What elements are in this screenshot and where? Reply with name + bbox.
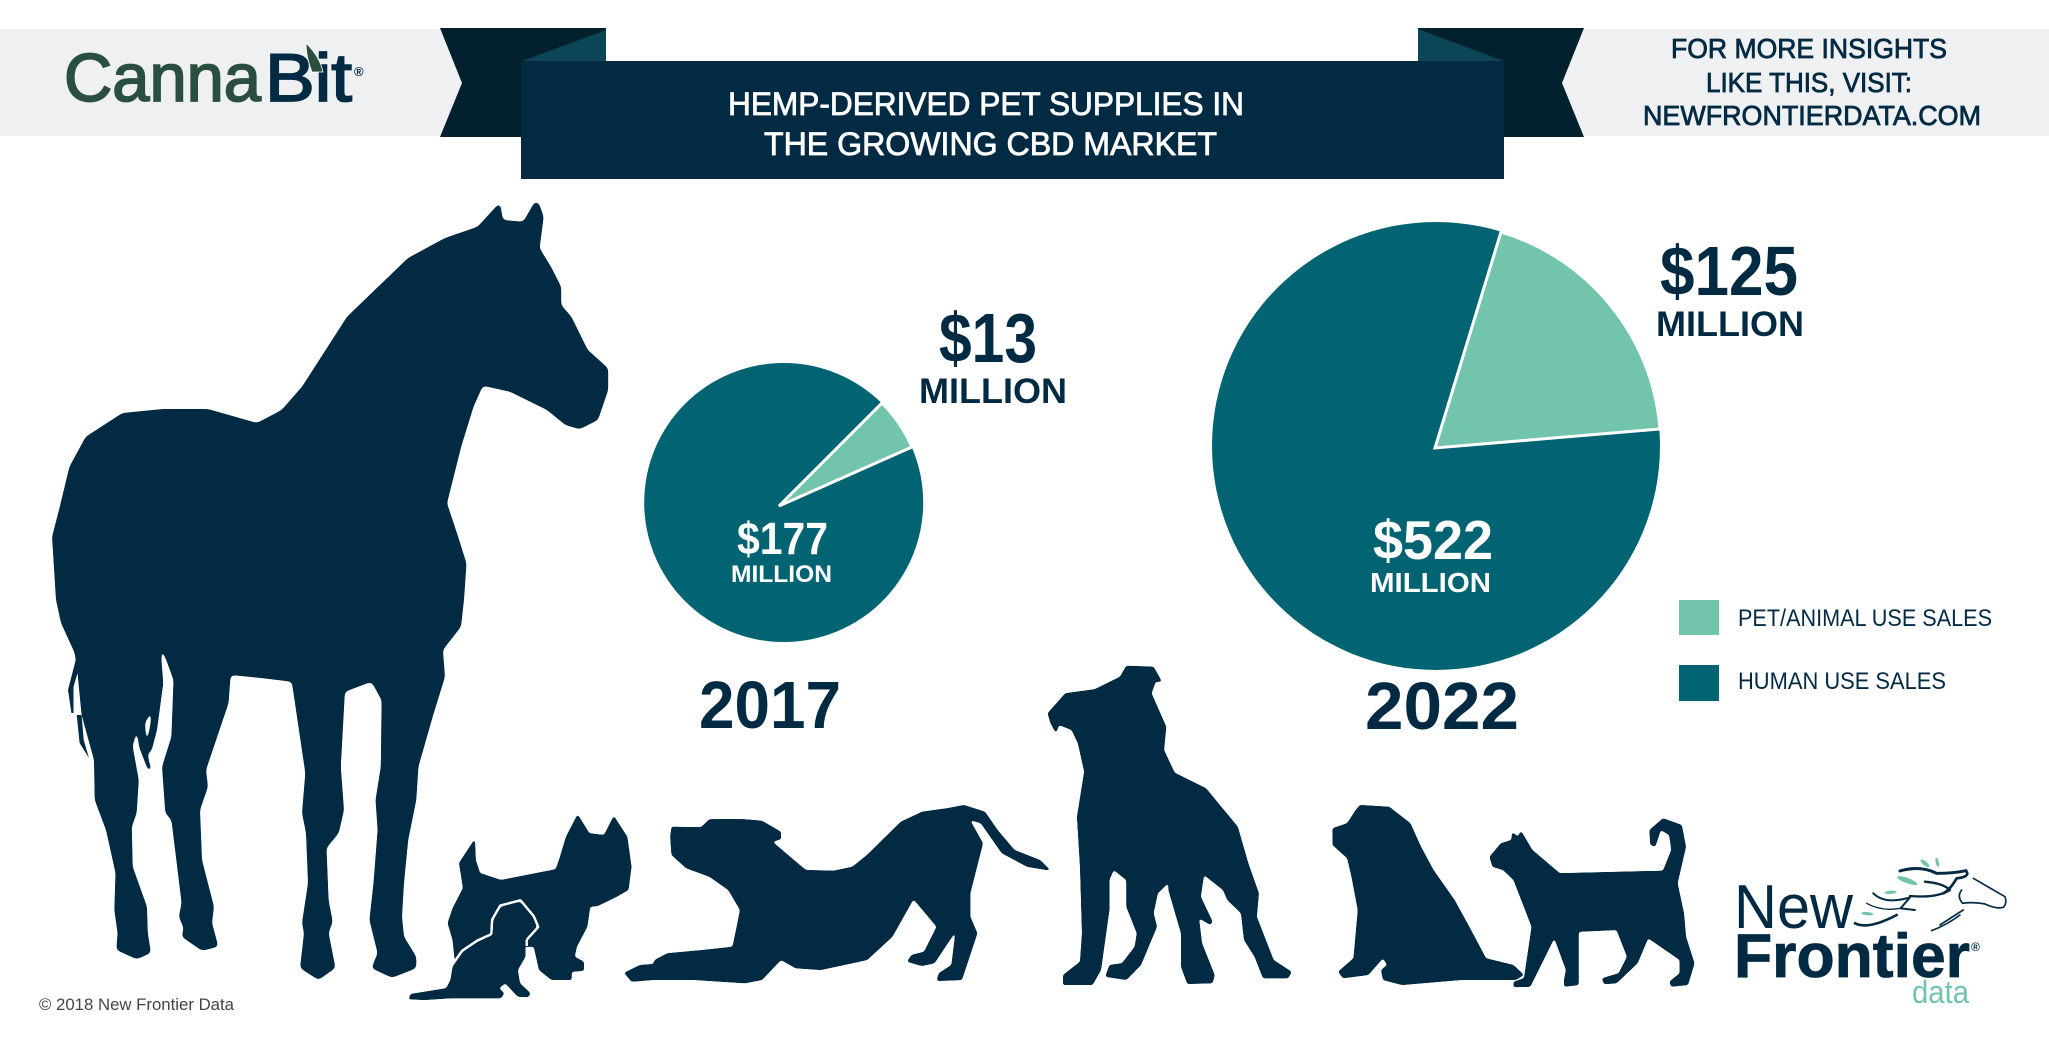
icon: running horse with leaves: [1855, 857, 2006, 931]
left fold highlight: [522, 30, 606, 61]
horse silhouette: [52, 202, 608, 980]
New Frontier data logo: New: [1734, 873, 1853, 942]
small dog silhouette: [448, 814, 632, 980]
right ribbon fold: [1418, 28, 1584, 137]
fluffy dog silhouette: [1332, 805, 1524, 985]
human sales label 2022: [1370, 509, 1493, 598]
cat silhouette: [1490, 818, 1694, 987]
human sales label 2022: $522: [1373, 509, 1493, 571]
icon: leaf on the i: [306, 43, 323, 72]
New Frontier data logo: [1734, 857, 2006, 1010]
pet sales label 2017: MILLION: [919, 372, 1067, 411]
left grey band: [0, 29, 475, 136]
horse tail strands: [68, 653, 89, 758]
kitten silhouette: [408, 902, 537, 1000]
title: [728, 86, 1244, 162]
legend label: human: HUMAN USE SALES: [1738, 668, 1946, 695]
pet sales label 2017: [919, 299, 1067, 411]
pet sales label 2022: MILLION: [1656, 305, 1804, 344]
CannaBit logo: Bit: [265, 40, 352, 116]
CannaBit logo: ®: [354, 64, 364, 79]
legend swatch: pet: [1679, 600, 1719, 635]
legend swatch: human: [1679, 665, 1719, 701]
pie chart 2017: [644, 363, 923, 642]
human sales label 2017: [731, 513, 832, 588]
right fold highlight: [1418, 29, 1504, 61]
main banner: [521, 61, 1504, 179]
pet slice 2022: [1435, 232, 1660, 448]
year 2017: 2017: [699, 668, 841, 743]
call to action text: [1643, 33, 1981, 131]
call to action text: FOR MORE INSIGHTS: [1671, 33, 1947, 64]
copyright: © 2018 New Frontier Data: [39, 995, 235, 1014]
pet sales label 2022: $125: [1660, 232, 1798, 310]
year 2022: 2022: [1365, 669, 1519, 744]
CannaBit logo: [64, 40, 364, 116]
pet sales label 2017: $13: [939, 299, 1037, 377]
CannaBit logo: Canna: [64, 40, 261, 116]
legend label: pet: PET/ANIMAL USE SALES: [1738, 605, 1992, 632]
header ribbon: [0, 28, 2049, 179]
standing dog silhouette: [1048, 666, 1292, 985]
kitten white outline: [453, 902, 537, 967]
human sales label 2017: MILLION: [731, 561, 832, 588]
New Frontier data logo: Frontier: [1734, 922, 1970, 991]
New Frontier data logo: ®: [1971, 940, 1980, 954]
pet sales label 2022: [1656, 232, 1804, 344]
legend: [1679, 600, 1992, 701]
call to action text: NEWFRONTIERDATA.COM: [1643, 100, 1981, 131]
pie chart 2022: [1212, 222, 1660, 670]
left ribbon fold: [440, 28, 606, 137]
playing dog silhouette: [624, 805, 1051, 983]
human sales label 2022: MILLION: [1370, 567, 1491, 598]
call to action text: LIKE THIS, VISIT:: [1706, 67, 1912, 98]
title: HEMP-DERIVED PET SUPPLIES IN: [728, 86, 1244, 122]
pet slice 2017: [779, 403, 912, 506]
New Frontier data logo: data: [1912, 974, 1969, 1010]
right grey band: [1550, 29, 2049, 136]
human sales label 2017: $177: [737, 513, 828, 564]
title: THE GROWING CBD MARKET: [764, 126, 1217, 162]
